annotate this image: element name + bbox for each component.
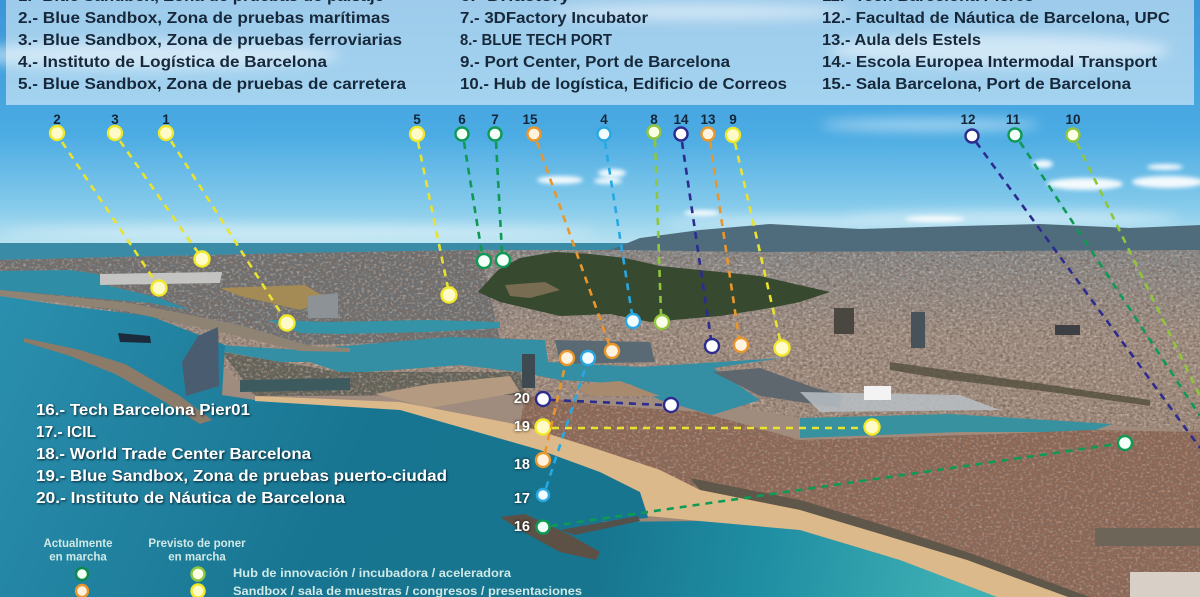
Montjuic hill: [478, 252, 830, 322]
marker 6 with leader: 6: [458, 112, 466, 127]
list column 3: 14.- Escola Europea Intermodal Transport: [822, 54, 1157, 71]
marker 4 with leader: [598, 112, 640, 328]
yachts marina: [800, 392, 1000, 412]
dark block: [1055, 325, 1080, 335]
container basin water: [268, 320, 500, 334]
beach: [255, 396, 1068, 597]
legend heading: current: Actualmente: [43, 538, 113, 550]
marker 5 with leader: 5: [413, 112, 421, 127]
marker 10 with leader: [1065, 112, 1200, 396]
marker 1 with leader: [159, 112, 294, 330]
clouds: [0, 4, 1200, 238]
list column 3: [822, 0, 1170, 93]
inner port water: [0, 270, 190, 310]
marker 18 with leader: 18: [514, 457, 530, 473]
marker 19 with leader: [514, 419, 880, 435]
ferry: [118, 333, 151, 343]
marker 2 with leader: 2: [53, 112, 61, 127]
marina water: [800, 414, 1112, 438]
white building: [864, 386, 891, 400]
legend: [43, 538, 582, 597]
lower list over the sea: 19.- Blue Sandbox, Zona de pruebas puerto-ciudad: [36, 468, 447, 485]
marker 5 with leader: [410, 112, 456, 302]
marker 7 with leader: 7: [491, 112, 499, 127]
list column 1: 5.- Blue Sandbox, Zona de pruebas de carretera: [18, 76, 406, 93]
marker 15 with leader: 15: [522, 112, 538, 127]
marker 10 with leader: 10: [1065, 112, 1081, 127]
silos: [308, 293, 338, 318]
marker 2 with leader: [50, 112, 166, 296]
maremagnum: [713, 368, 842, 408]
marker 13 with leader: 13: [700, 112, 716, 127]
marker 8 with leader: 8: [650, 112, 658, 127]
legend heading: current: en marcha: [49, 552, 107, 564]
list column 1: [18, 0, 406, 93]
marker 14 with leader: [673, 112, 719, 353]
marker 13 with leader: [700, 112, 748, 352]
marker 3 with leader: [108, 112, 210, 266]
sky background: [0, 0, 1200, 244]
marker 20 with leader: 20: [514, 391, 530, 407]
seafront promenade: [690, 478, 1090, 597]
marker 19 with leader: 19: [514, 419, 530, 435]
marker 9 with leader: 9: [729, 112, 737, 127]
Sagrada Familia area: [834, 308, 854, 334]
marker 17 with leader: 17: [514, 491, 530, 507]
tower of Jaume I: [522, 354, 535, 388]
west breakwater: [24, 338, 212, 424]
lower list over the sea: [36, 402, 447, 507]
marker 4 with leader: 4: [600, 112, 608, 127]
port cranes and containers: [220, 285, 330, 310]
list column 3: 15.- Sala Barcelona, Port de Barcelona: [822, 76, 1131, 93]
marker 8 with leader: [648, 112, 669, 329]
list column 3: 13.- Aula dels Estels: [822, 32, 981, 49]
list column 2: 10.- Hub de logística, Edificio de Correos: [460, 76, 787, 93]
breakwater at Barceloneta: [500, 514, 600, 560]
outer breakwater: [0, 290, 350, 352]
marker 18 with leader: [514, 351, 574, 473]
marker 15 with leader: [522, 112, 619, 358]
marker 1 with leader: 1: [162, 112, 170, 127]
legend row: hub: [76, 568, 512, 580]
lower list over the sea: 20.- Instituto de Náutica de Barcelona: [36, 490, 345, 507]
marker 16 with leader: [514, 436, 1132, 535]
lower list over the sea: 16.- Tech Barcelona Pier01: [36, 402, 250, 419]
mountains: [605, 224, 1200, 258]
world trade center pier: [570, 381, 660, 396]
port buildings: [240, 378, 350, 392]
marker 9 with leader: [726, 112, 790, 356]
legend heading: planned: Previsto de poner: [148, 538, 246, 550]
legend heading: planned: en marcha: [168, 552, 226, 564]
palm avenue: [890, 362, 1150, 406]
list column 2: 8.- BLUE TECH PORT: [460, 32, 613, 49]
list column 3: 12.- Facultad de Náutica de Barcelona, UPC: [822, 10, 1170, 27]
lower list over the sea: 18.- World Trade Center Barcelona: [36, 446, 311, 463]
marker 16 with leader: 16: [514, 519, 530, 535]
Barceloneta district: [520, 395, 1200, 597]
list column 1: 2.- Blue Sandbox, Zona de pruebas marítimas: [18, 10, 390, 27]
list column 2: 9.- Port Center, Port de Barcelona: [460, 54, 730, 71]
hill cliffs: [505, 282, 560, 298]
hotel W: [182, 327, 219, 396]
marker 17 with leader: [514, 351, 595, 507]
marker 12 with leader: 12: [960, 112, 976, 127]
oil tanks: [100, 272, 222, 285]
list column 2: 7.- 3DFactory Incubator: [460, 10, 648, 27]
distant sea: [0, 243, 700, 273]
marker 20 with leader: [514, 391, 678, 412]
list column 2: [460, 0, 787, 93]
legend row: sandbox: [76, 584, 582, 597]
top list panel: [6, 0, 1194, 105]
marker 3 with leader: 3: [111, 112, 119, 127]
cruise terminal: [555, 340, 655, 364]
jetty: [560, 516, 640, 535]
lower list over the sea: 17.- ICIL: [36, 424, 96, 441]
open sea: [0, 296, 648, 597]
list column 1: 3.- Blue Sandbox, Zona de pruebas ferroviarias: [18, 32, 402, 49]
list column 1: 4.- Instituto de Logística de Barcelona: [18, 54, 327, 71]
marker 14 with leader: 14: [673, 112, 689, 127]
marker 7 with leader: [488, 112, 510, 267]
tall tower: [911, 312, 925, 348]
harbor water: [220, 337, 783, 415]
legend row: hub: Hub de innovación / incubadora / aceleradora: [233, 568, 512, 580]
marker 11 with leader: 11: [1006, 112, 1021, 127]
city and port land: [0, 250, 1200, 597]
bay water: [600, 521, 997, 597]
marker 12 with leader: [960, 112, 1200, 448]
marker 6 with leader: [456, 112, 491, 268]
old port pavilions: [375, 376, 520, 408]
marker 11 with leader: [1006, 112, 1200, 416]
